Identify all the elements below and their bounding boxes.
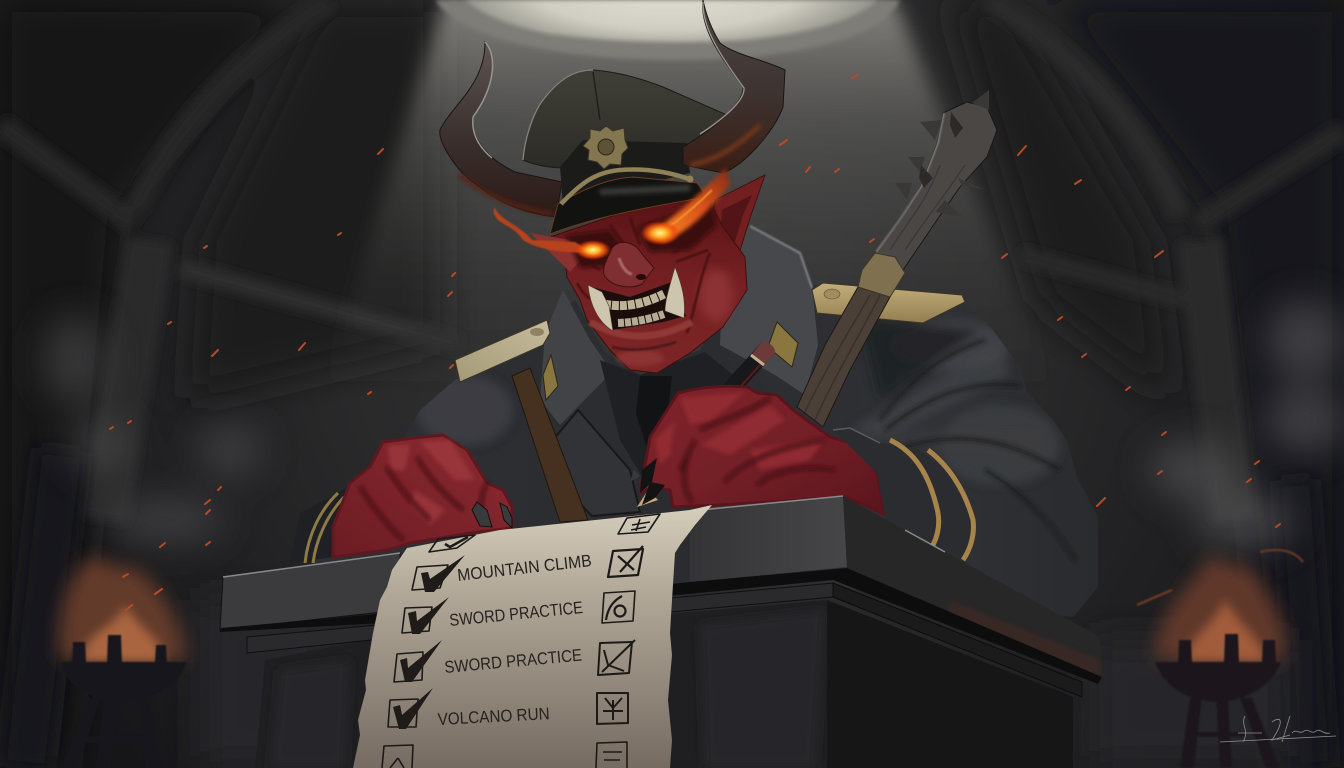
brazier: right (1137, 550, 1303, 768)
claws (640, 458, 665, 505)
ear: right (708, 175, 765, 260)
visor (550, 177, 707, 234)
gold cord (561, 169, 692, 204)
base front (255, 600, 827, 768)
eye: left (575, 240, 611, 260)
hand highlights (655, 392, 825, 470)
row box 4 (388, 699, 418, 727)
scroll item: mountain climb: MOUNTAIN CLIMB (456, 551, 593, 585)
finger grooves (360, 457, 487, 540)
collar right (720, 225, 818, 395)
breast pocket flap (547, 410, 640, 516)
hand: right (630, 386, 885, 515)
parchment (353, 505, 712, 768)
left ear tip (530, 233, 585, 272)
right box 5 (596, 742, 627, 768)
chin highlight (616, 350, 664, 366)
face (530, 197, 747, 373)
row box 1 (412, 565, 448, 590)
row box 2 (402, 607, 432, 633)
ceiling lamp opening (435, 0, 900, 60)
tier right (833, 583, 1082, 697)
base front texture (270, 610, 825, 768)
lower lip (590, 322, 692, 336)
mace lower handle (797, 287, 890, 427)
row box 5 (382, 745, 413, 768)
mouth (592, 282, 686, 330)
mace wrap (858, 253, 905, 297)
base right (827, 600, 1073, 768)
top box tick (445, 537, 468, 547)
claws (472, 502, 512, 528)
cap badge (583, 126, 628, 169)
scroll checklist (353, 505, 712, 768)
collar badge right (768, 322, 798, 367)
slab red tint (950, 600, 1100, 677)
wrinkles (577, 218, 710, 333)
flames from eyes (494, 168, 730, 260)
slab front left (220, 553, 400, 630)
epaulette right (812, 283, 965, 323)
pencil (637, 342, 775, 507)
cap (523, 70, 727, 234)
epaulette left (455, 320, 550, 382)
embers (110, 75, 1280, 610)
cheek highlight (699, 269, 733, 321)
right box 3 (598, 640, 635, 675)
gold stripes (890, 440, 973, 560)
scroll item: sword practice again: SWORD PRACTICE (444, 646, 583, 677)
right box 1 (608, 546, 643, 577)
sleeve cuff right (833, 428, 975, 565)
smoke: right (1150, 300, 1344, 550)
mace grain (890, 165, 965, 250)
slab right face (843, 496, 1102, 677)
fang: right (665, 267, 685, 318)
uniform shading (417, 320, 1075, 560)
mace (797, 90, 997, 427)
upper teeth (604, 294, 664, 306)
horn: right (683, 0, 785, 173)
fang: left (588, 285, 613, 331)
mace spikes (895, 90, 989, 217)
slab highlights (223, 496, 945, 577)
row box top-left (429, 535, 475, 552)
uniform body (300, 225, 1098, 617)
scroll item: sword practice: SWORD PRACTICE (449, 598, 584, 630)
right box 2 (602, 591, 635, 623)
finger grooves (680, 398, 835, 502)
eye: right (640, 221, 680, 245)
row box 3 (394, 652, 423, 682)
hand: left (333, 435, 512, 557)
lower teeth (618, 314, 664, 323)
collar badge left (543, 355, 558, 400)
slab front right (690, 496, 847, 582)
smoke: left (43, 315, 262, 544)
horn: left (440, 42, 562, 217)
scroll item: volcano run: VOLCANO RUN (437, 704, 550, 729)
podium (220, 496, 1102, 768)
artist signature (1220, 716, 1336, 742)
hand highlights (388, 440, 475, 525)
check marks (393, 555, 465, 729)
leather strap (512, 368, 588, 522)
slab under shadow (220, 568, 1102, 684)
shirt and tie (600, 352, 745, 490)
right box 0 (618, 514, 660, 534)
right box 4 (597, 693, 628, 724)
cap band (560, 140, 690, 205)
nose (604, 242, 654, 287)
cap crown (523, 70, 727, 168)
collar left (540, 290, 612, 425)
brazier: left (59, 555, 187, 768)
tier front (247, 583, 833, 653)
light cone from ceiling (320, 0, 1060, 400)
eye sockets and brows (566, 200, 716, 268)
mace upper shaft (875, 102, 997, 270)
sleeve cuff left (290, 488, 347, 563)
